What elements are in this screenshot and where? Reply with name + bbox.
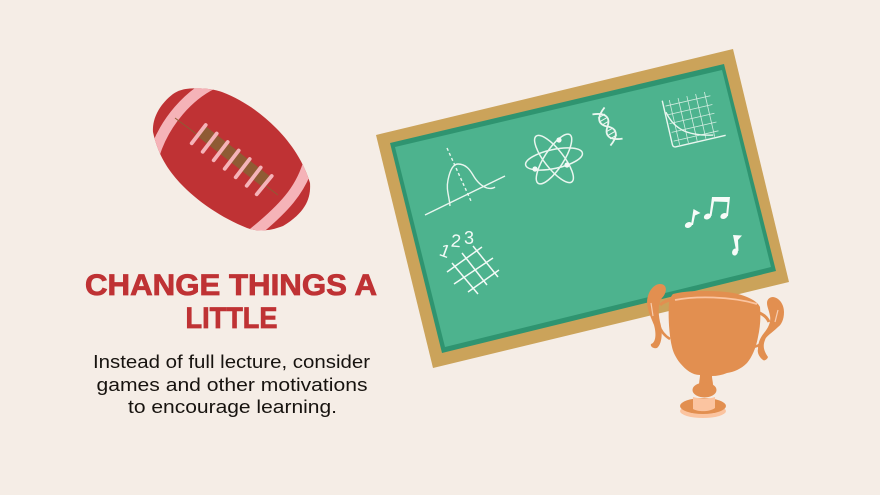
- description text: [93, 351, 370, 417]
- trophy cup: [669, 291, 760, 385]
- chalkboard: [376, 49, 789, 368]
- title: [85, 269, 377, 335]
- chalk: decay graph: [662, 89, 726, 147]
- trophy handles: [647, 284, 784, 360]
- chalk: numbers and grid: 1: [437, 240, 453, 262]
- football: [153, 84, 310, 236]
- description text: to encourage learning.: [128, 396, 337, 417]
- title: CHANGE THINGS A: [85, 269, 377, 302]
- trophy base: [680, 404, 726, 418]
- chalk: numbers and grid: 2: [450, 231, 462, 251]
- description text: Instead of full lecture, consider: [93, 351, 370, 372]
- description text: games and other motivations: [96, 374, 368, 395]
- chalk: numbers and grid: 3: [464, 228, 474, 248]
- chalk: numbers and grid: [437, 228, 499, 294]
- chalk: atom: [524, 130, 584, 188]
- chalk: bell curve: [425, 148, 505, 215]
- title: LITTLE: [186, 302, 278, 335]
- trophy: [647, 284, 784, 418]
- chalk: music notes: [684, 197, 742, 256]
- chalk: dna helix: [592, 107, 623, 146]
